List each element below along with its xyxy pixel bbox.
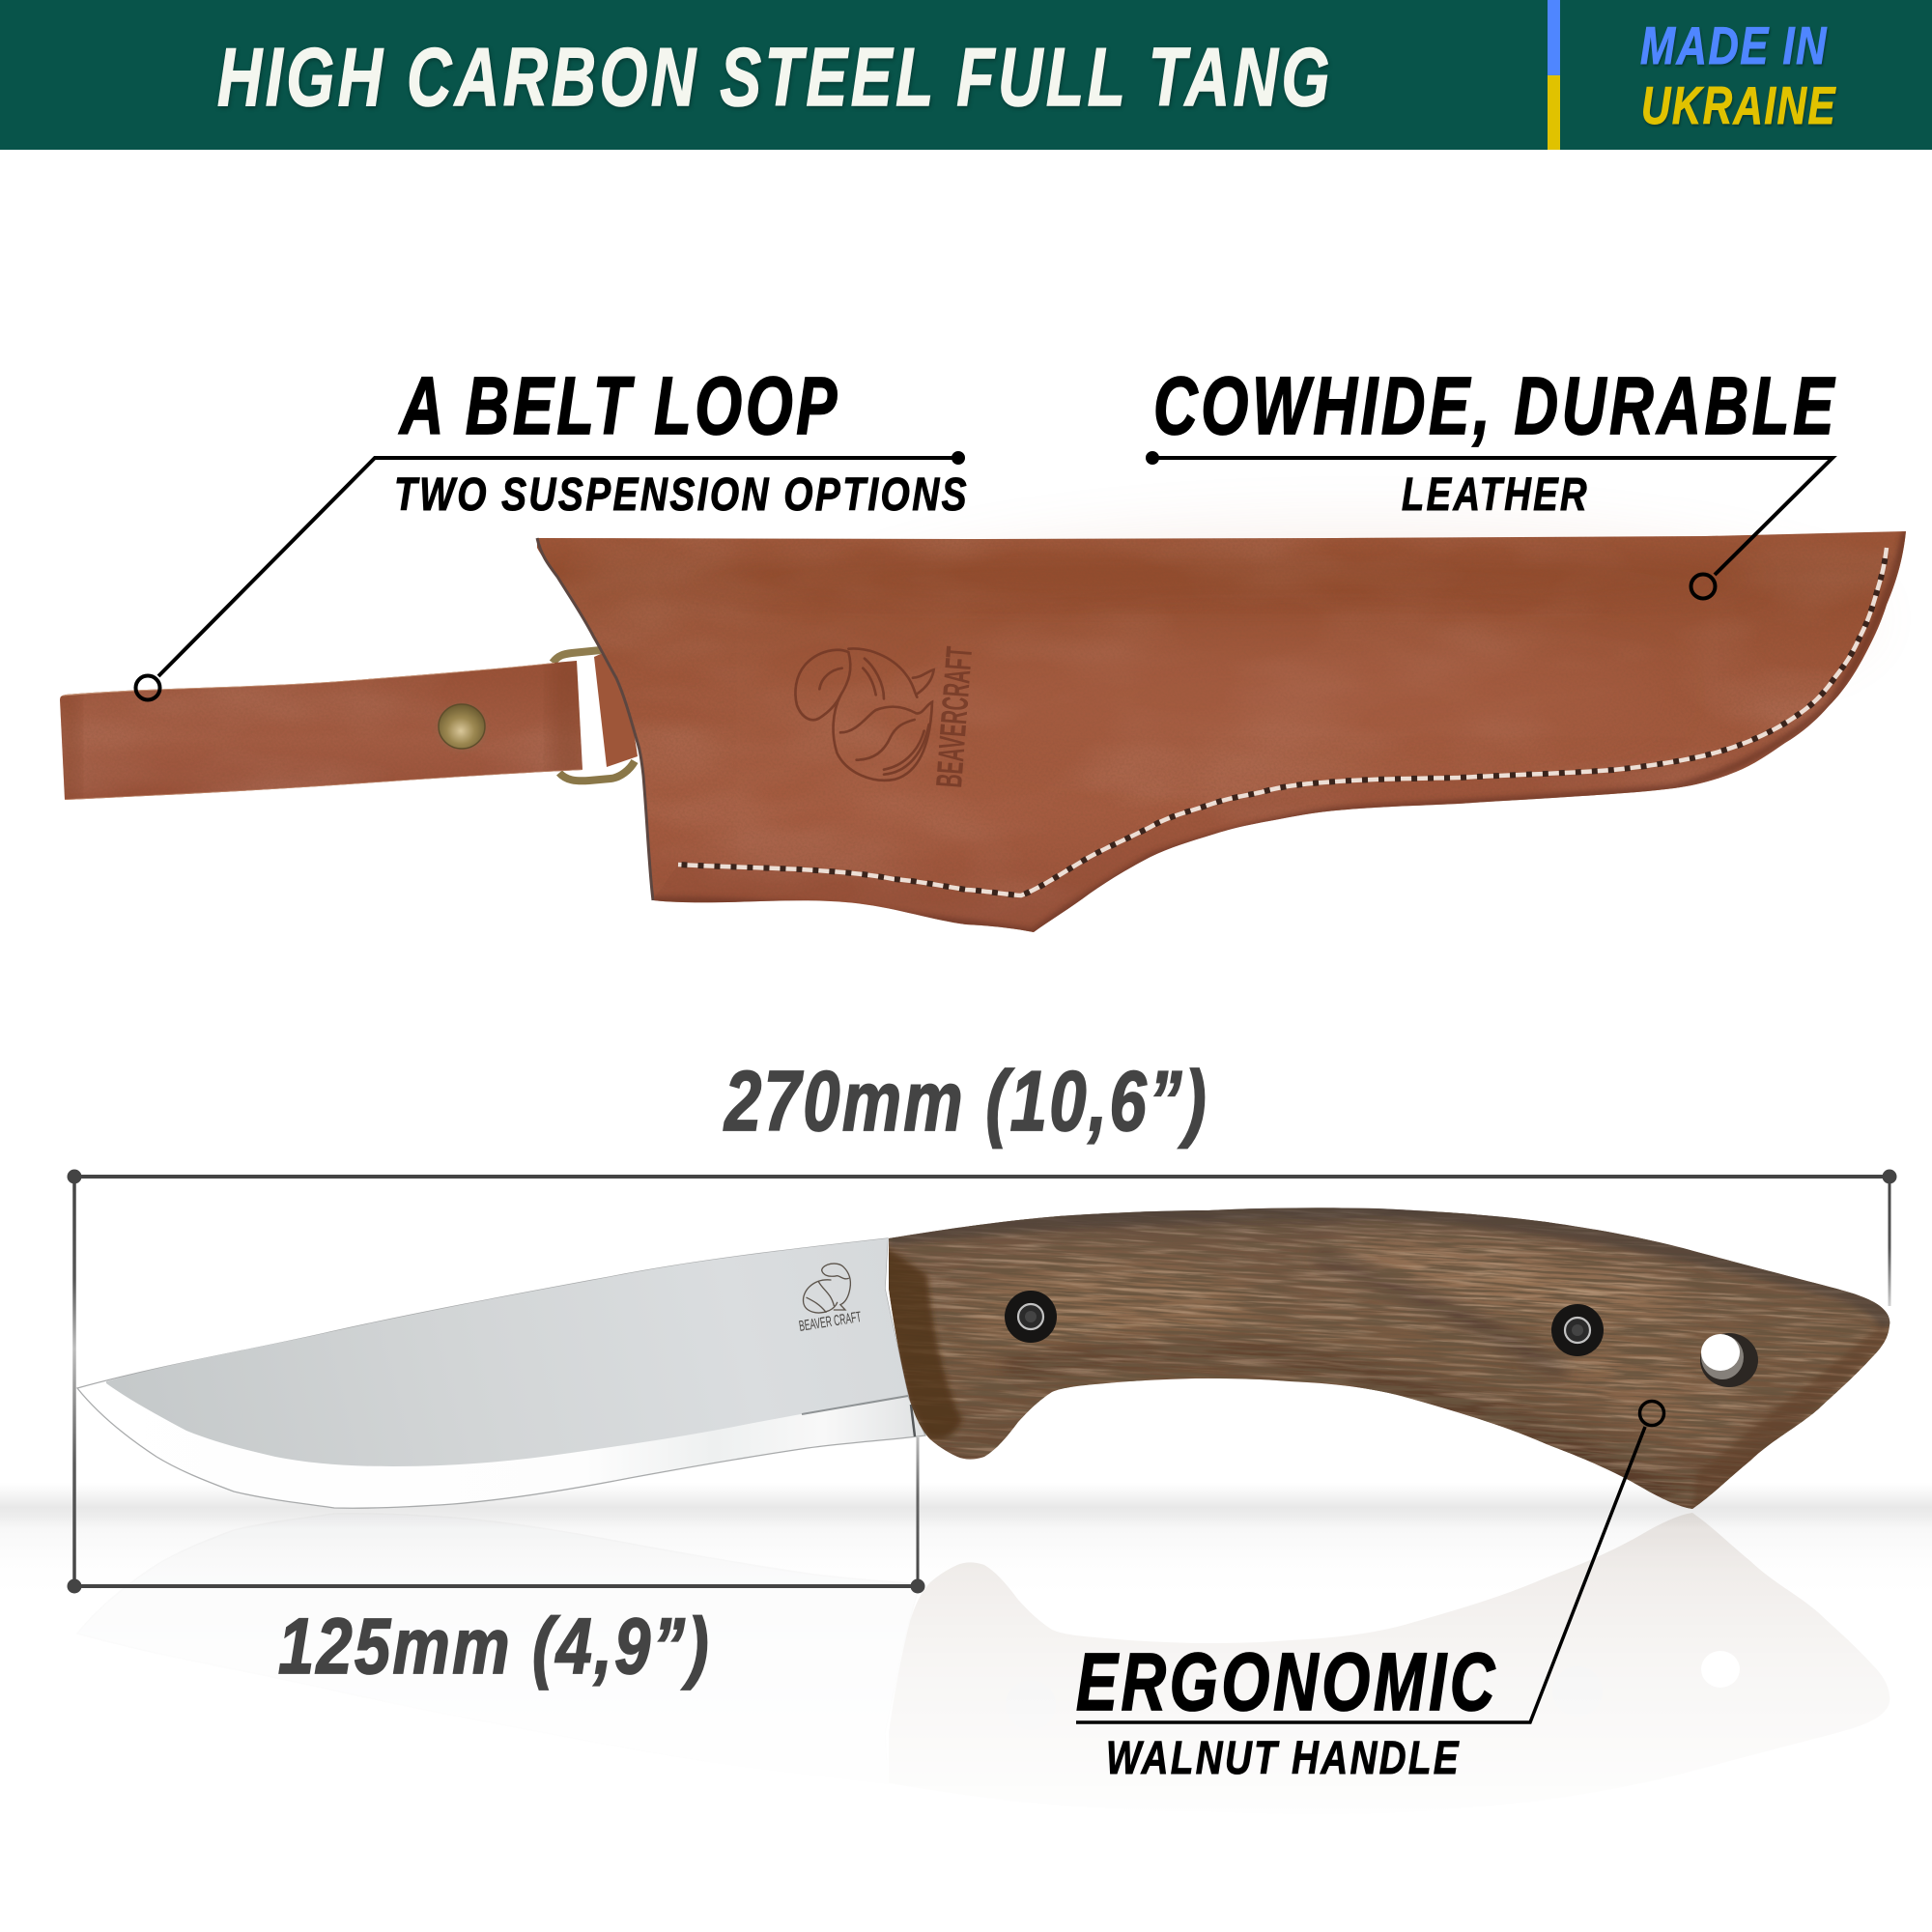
strap back piece [594, 653, 638, 767]
heading: a belt loop: A BELT LOOP [399, 360, 840, 451]
brass rivet [437, 703, 487, 752]
lanyard hole [1700, 1333, 1758, 1387]
blade heel notch [911, 1405, 915, 1436]
butt rivet [1551, 1304, 1604, 1356]
overall length bracket [68, 1169, 1897, 1586]
leader line to strap [135, 452, 964, 699]
callout: ergonomic walnut handle [1076, 1401, 1663, 1784]
floor shadow band [0, 1483, 1932, 1594]
dark swirl [1317, 1254, 1565, 1372]
subheading: walnut handle: WALNUT HANDLE [1106, 1733, 1461, 1784]
sheath soft glow [831, 522, 1874, 715]
blade engraved logo: BEAVER CRAFT [798, 1309, 863, 1335]
blade length bracket [68, 1437, 925, 1594]
walnut handle [889, 1208, 1889, 1509]
product: knife [76, 1208, 1889, 1509]
brass d-ring [553, 650, 635, 781]
dimension: blade length [68, 1437, 925, 1690]
sheath body [531, 526, 1922, 956]
blade engraved logo [798, 1264, 863, 1335]
leader line to handle [1076, 1401, 1663, 1722]
ukraine: UKRAINE [1641, 75, 1836, 135]
blade flat [106, 1238, 908, 1466]
dimension: overall length [68, 1053, 1897, 1586]
heading: ergonomic: ERGONOMIC [1076, 1636, 1498, 1727]
blade length label: 125mm (4,9”) [278, 1603, 711, 1690]
overall length label: 270mm (10,6”) [723, 1053, 1208, 1149]
subheading: leather: LEATHER [1402, 469, 1589, 521]
wood light patches [1333, 1229, 1689, 1327]
header bar [0, 0, 1932, 150]
ukrainian flag stripe [1548, 0, 1560, 150]
belt strap [53, 657, 589, 807]
callout: cowhide durable leather [1147, 360, 1837, 599]
stitching thread [678, 548, 1887, 895]
embossed beaver logo [795, 648, 934, 781]
blade-end facet [881, 1246, 962, 1440]
rear rivet [1005, 1291, 1057, 1343]
grind line [802, 1396, 908, 1414]
made in: MADE IN [1640, 15, 1828, 75]
blade [77, 1238, 925, 1508]
product: leather sheath with belt loop [53, 522, 1922, 956]
sheath cut edge [537, 538, 653, 900]
top bevel shading [889, 1208, 1889, 1325]
leader line to sheath [1147, 452, 1833, 599]
knife reflection [895, 1513, 1889, 1702]
embossed brand text: BEAVERCRAFT [929, 645, 980, 789]
subheading: two suspension options: TWO SUSPENSION OPTIONS [394, 469, 969, 521]
stitching underlay [678, 548, 1887, 895]
title: high carbon steel full tang: HIGH CARBON STEEL FULL TANG [217, 32, 1333, 124]
callout: a belt loop [135, 360, 969, 699]
butt facet [1692, 1327, 1898, 1517]
